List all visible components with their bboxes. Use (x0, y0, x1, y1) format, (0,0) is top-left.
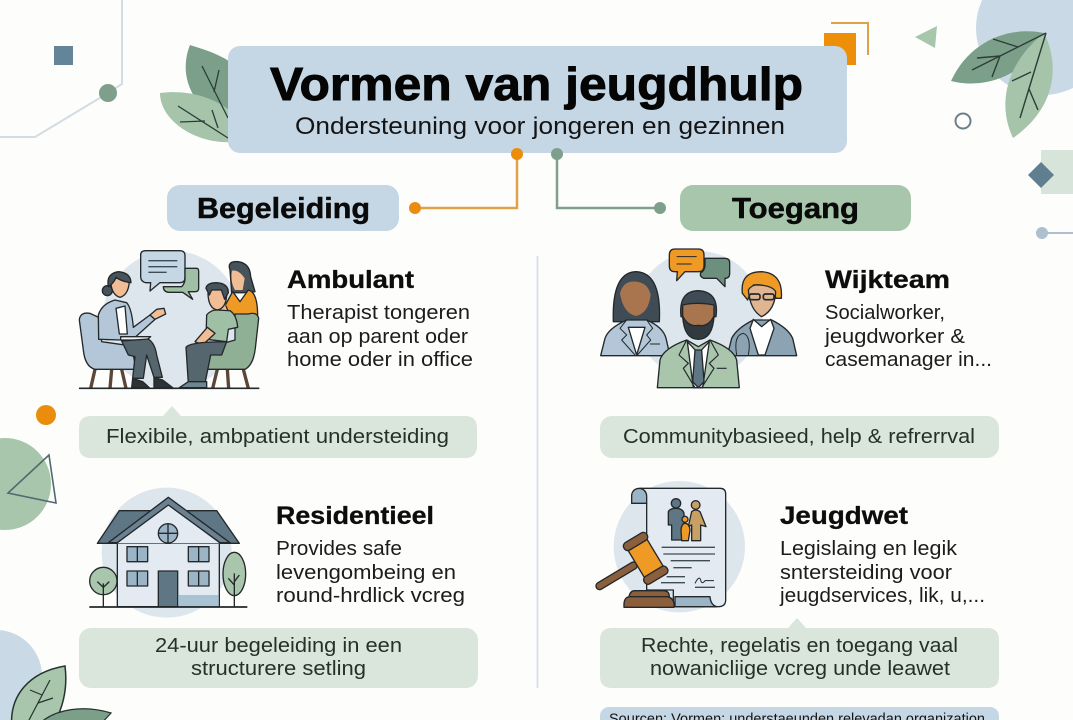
decoration: top-right shapes (824, 0, 1073, 239)
icon: neighbourhood team (601, 249, 797, 388)
decoration: left side shapes (0, 405, 56, 720)
subtitle: Ondersteuning voor jongeren en gezinnen (295, 113, 785, 140)
callout: Residentieel (79, 628, 478, 688)
text: Ambulant: home oder in office (287, 349, 473, 371)
title panel (228, 46, 847, 153)
text: Residentieel: Residentieel (276, 502, 434, 530)
source bar (600, 707, 999, 720)
text: Residentieel: levengombeing en (276, 562, 456, 584)
text: Jeugdwet: jeugdservices, lik, u,... (779, 585, 985, 607)
text: Ambulant: Ambulant (287, 266, 415, 294)
text: Ambulant: Therapist tongeren (287, 302, 470, 324)
connector: green to Toegang (551, 148, 666, 214)
icon: header leaves (160, 45, 240, 142)
text: Jeugdwet: sntersteiding voor (780, 562, 952, 584)
callout: Ambulant (79, 406, 477, 458)
icon: bottom-left leaves (12, 666, 111, 720)
callout: Wijkteam: Communitybasieed, help & refrerrval (623, 426, 975, 448)
text: Residentieel: round-hrdlick vcreg (276, 585, 465, 607)
icon: house (89, 488, 247, 618)
connector: orange to Begeleiding (409, 148, 523, 214)
icon: counselling session (79, 251, 259, 389)
text: Wijkteam: Socialworker, (825, 302, 945, 324)
callout: Ambulant: Flexibile, ambpatient understeiding (106, 426, 449, 448)
text: Wijkteam: casemanager in... (825, 349, 992, 371)
text: Jeugdwet (779, 502, 985, 607)
callout: Jeugdwet: Rechte, regelatis en toegang vaal (641, 635, 958, 657)
text: Residentieel (276, 502, 465, 607)
heading pill: Toegang (680, 185, 911, 231)
text: Wijkteam (824, 266, 992, 371)
decoration: top-left circuit line (0, 0, 122, 137)
heading pill: Begeleiding (167, 185, 399, 231)
callout: Jeugdwet: nowanicliige vcreg unde leawet (650, 658, 950, 680)
callout: Wijkteam (600, 416, 999, 458)
icon: legal document and gavel (584, 481, 745, 612)
title: Vormen van jeugdhulp (270, 58, 803, 110)
icon: top-right leaves (951, 31, 1053, 138)
text: Wijkteam: jeugdworker & (824, 326, 966, 348)
text: Wijkteam: Wijkteam (825, 266, 950, 294)
heading pill: Begeleiding: Begeleiding (197, 193, 370, 225)
text: Jeugdwet: Legislaing en legik (780, 538, 958, 560)
text: Ambulant (287, 266, 473, 371)
callout: Jeugdwet (600, 618, 999, 688)
text: Ambulant: aan op parent oder (287, 326, 468, 348)
text: Jeugdwet: Jeugdwet (780, 502, 909, 530)
heading pill: Toegang: Toegang (732, 193, 859, 225)
callout: Residentieel: 24-uur begeleiding in een (155, 635, 402, 657)
text: Residentieel: Provides safe (276, 538, 402, 560)
callout: Residentieel: structurere setling (191, 658, 366, 680)
